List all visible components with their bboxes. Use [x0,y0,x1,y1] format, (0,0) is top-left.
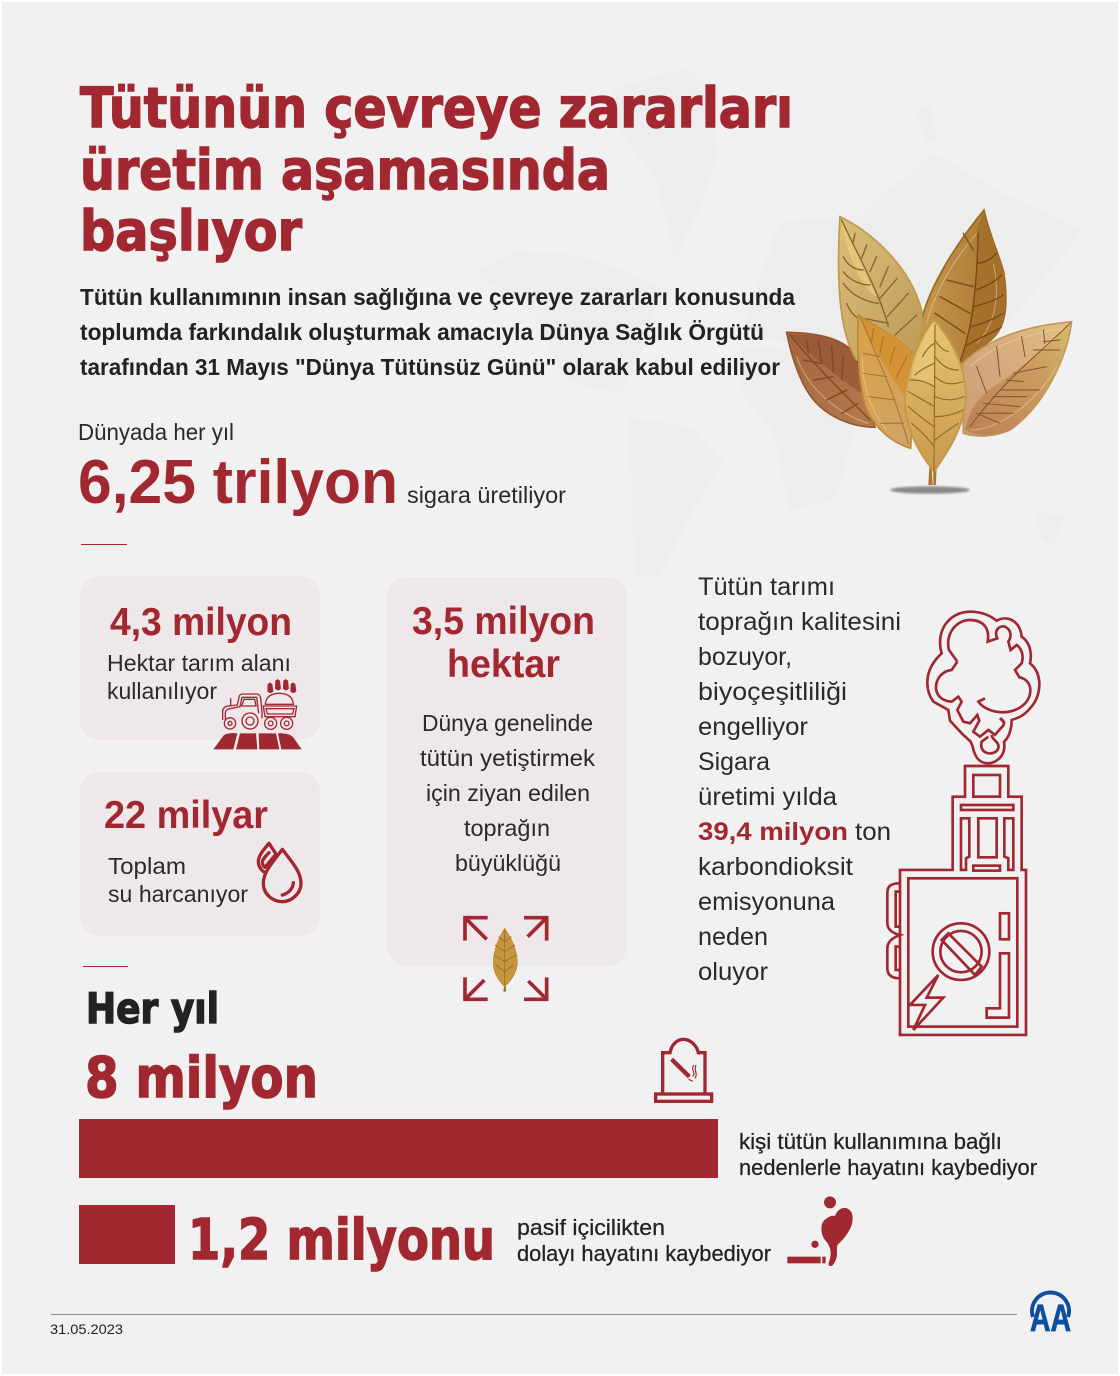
intro text [80,284,795,380]
intro text: toplumda farkındalık oluşturmak amacıyla Dünya Sağlık Örgütü [80,319,764,345]
icon: passive smoker [787,1196,853,1266]
panel: water: 22 milyar [104,794,268,837]
panel: water [80,772,320,936]
text: soil and emissions [698,573,901,986]
panel: land area: toprağın [464,815,550,841]
text: soil and emissions: emisyonuna [698,888,835,916]
title: üretim aşamasında [80,138,610,202]
icon: water drops [258,843,301,902]
panel: land area [387,577,627,999]
world map background [476,67,1083,576]
text: deaths caption [739,1129,1037,1180]
bar: 8 million [79,1119,718,1178]
text: soil and emissions: bozuyor, [698,643,792,671]
panel: farmland [80,576,320,749]
text: soil and emissions: engelliyor [698,713,808,741]
intro text: tarafından 31 Mayıs "Dünya Tütünsüz Günü" olarak kabul ediliyor [80,354,780,380]
icon: arrows and leaf [465,918,547,999]
text: passive smoking caption: pasif içicilikten [517,1215,665,1240]
title: Tütünün çevreye zararları [80,76,793,140]
text: soil and emissions: neden [698,923,768,951]
panel: farmland: Hektar tarım alanı [107,650,291,676]
stat: world cigarette production: 6,25 trilyon [78,448,398,517]
text: soil and emissions: üretimi yılda [698,783,837,811]
stat: annual deaths heading [85,984,318,1111]
leaf: top right [919,210,1006,365]
leaf: middle left [858,315,915,448]
panel: water: Toplam [108,853,186,879]
logo: AA [1030,1292,1071,1340]
text: soil and emissions: oluyor [698,958,768,986]
icon: vape device with smoke [887,612,1039,1035]
stat: world cigarette production: sigara üretiliyor [407,482,566,508]
panel: land area: hektar [447,643,560,686]
panel: water: su harcanıyor [108,881,248,907]
text: soil and emissions: Tütün tarımı [698,573,835,601]
stat: world cigarette production: Dünyada her yıl [78,419,234,445]
text: soil and emissions: toprağın kalitesini [698,608,901,636]
leaf: top left [839,217,922,360]
text: soil and emissions: ton [855,818,891,846]
text: deaths caption: kişi tütün kullanımına bağlı [739,1129,1002,1154]
panel: land area: Dünya genelinde [422,710,593,736]
panel: farmland: kullanılıyor [107,678,217,704]
text: soil and emissions: karbondioksit [698,853,853,881]
panel: farmland: 4,3 milyon [110,601,292,644]
leaf: brown left [787,332,875,427]
text: soil and emissions: 39,4 milyon [698,818,848,846]
date: 31.05.2023 [50,1321,123,1337]
text: soil and emissions: Sigara [698,748,770,776]
intro text: Tütün kullanımının insan sağlığına ve çevreye zararları konusunda [80,284,795,310]
stat: 1.2 million: 1,2 milyonu [188,1208,495,1273]
stat: world cigarette production [78,419,566,517]
panel: land area: tütün yetiştirmek [420,745,596,771]
logo: AA: AA [1030,1298,1071,1340]
stat: annual deaths heading: Her yıl [86,984,219,1033]
bar: 1.2 million [79,1205,175,1264]
text: passive smoking caption: dolayı hayatını kaybediyor [517,1241,771,1266]
stat: annual deaths heading: 8 milyon [85,1046,318,1111]
panel: land area: için ziyan edilen [426,780,590,806]
footer line [51,1314,1017,1315]
panel: land area: büyüklüğü [455,850,561,876]
title: başlıyor [80,199,302,263]
text: deaths caption: nedenlerle hayatını kaybediyor [739,1155,1037,1180]
text: passive smoking caption [517,1215,771,1266]
title [80,76,793,263]
panel: land area: 3,5 milyon [412,600,595,643]
illustration: tobacco leaves [787,210,1072,494]
leaf: center [905,320,966,485]
icon: smoke cloud [927,612,1039,763]
text: soil and emissions: biyoçeşitliliği [698,678,847,706]
icon: tractor [213,679,302,749]
leaf: right [963,322,1072,436]
icon: gravestone [656,1039,712,1101]
